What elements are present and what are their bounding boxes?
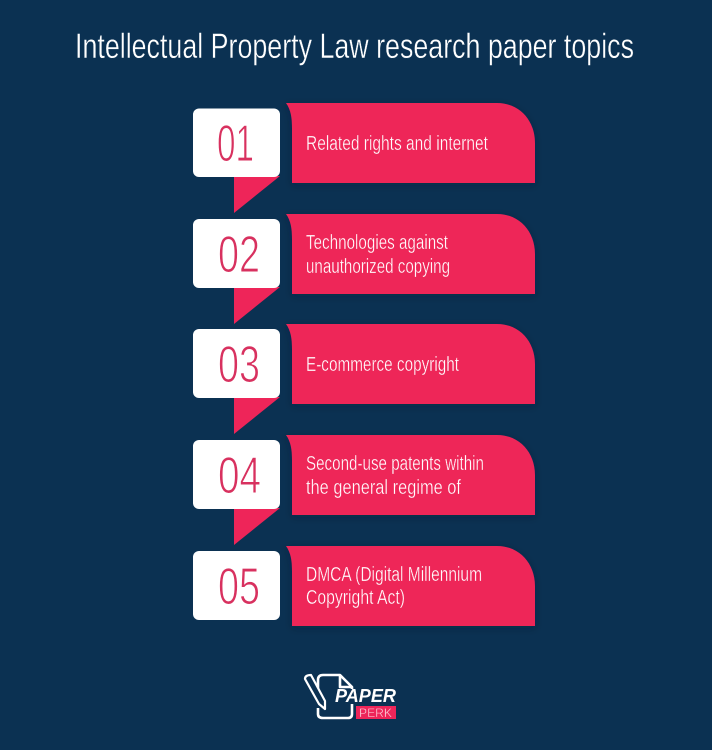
label 03: E-commerce copyright xyxy=(306,354,459,376)
banner 03 xyxy=(286,324,535,404)
number card 03 xyxy=(193,329,280,398)
label 04 xyxy=(306,453,484,499)
item 03 xyxy=(193,324,535,434)
number 01: 01 xyxy=(217,115,254,173)
icon: document outline xyxy=(318,675,352,718)
label 04: Second-use patents within xyxy=(306,453,484,475)
label 05: Copyright Act) xyxy=(306,587,405,609)
number 05: 05 xyxy=(218,558,260,616)
label 05 xyxy=(306,564,482,609)
number 02: 02 xyxy=(218,226,260,284)
badge: perk xyxy=(356,706,396,719)
banner 05 xyxy=(286,546,535,626)
label 02: Technologies against xyxy=(306,232,448,254)
label 02: unauthorized copying xyxy=(306,256,450,278)
item 02 xyxy=(193,214,535,324)
item 05 xyxy=(193,546,535,626)
item 01 xyxy=(193,103,535,213)
banner 02 xyxy=(286,214,535,294)
pointer 02 xyxy=(234,287,280,324)
banner 01 xyxy=(286,103,535,183)
number card 01 xyxy=(193,108,280,177)
pointer 03 xyxy=(234,397,280,434)
label 05: DMCA (Digital Millennium xyxy=(306,564,482,586)
number card 05 xyxy=(193,551,280,620)
pointer 04 xyxy=(234,508,280,545)
wordmark: paper: PAPER xyxy=(335,686,396,706)
number card 02 xyxy=(193,219,280,288)
number card 04 xyxy=(193,440,280,509)
number 04: 04 xyxy=(218,447,261,505)
wordmark: perk: PERK xyxy=(359,706,392,720)
item 04 xyxy=(193,435,535,545)
number 03: 03 xyxy=(218,336,260,394)
banner 04 xyxy=(286,435,535,515)
logo: Paper Perk xyxy=(305,675,396,720)
label 02 xyxy=(306,232,450,278)
pointer 01 xyxy=(234,176,280,213)
label 04: the general regime of xyxy=(306,477,461,499)
label 01: Related rights and internet xyxy=(306,133,488,155)
icon: pencil xyxy=(305,675,325,709)
